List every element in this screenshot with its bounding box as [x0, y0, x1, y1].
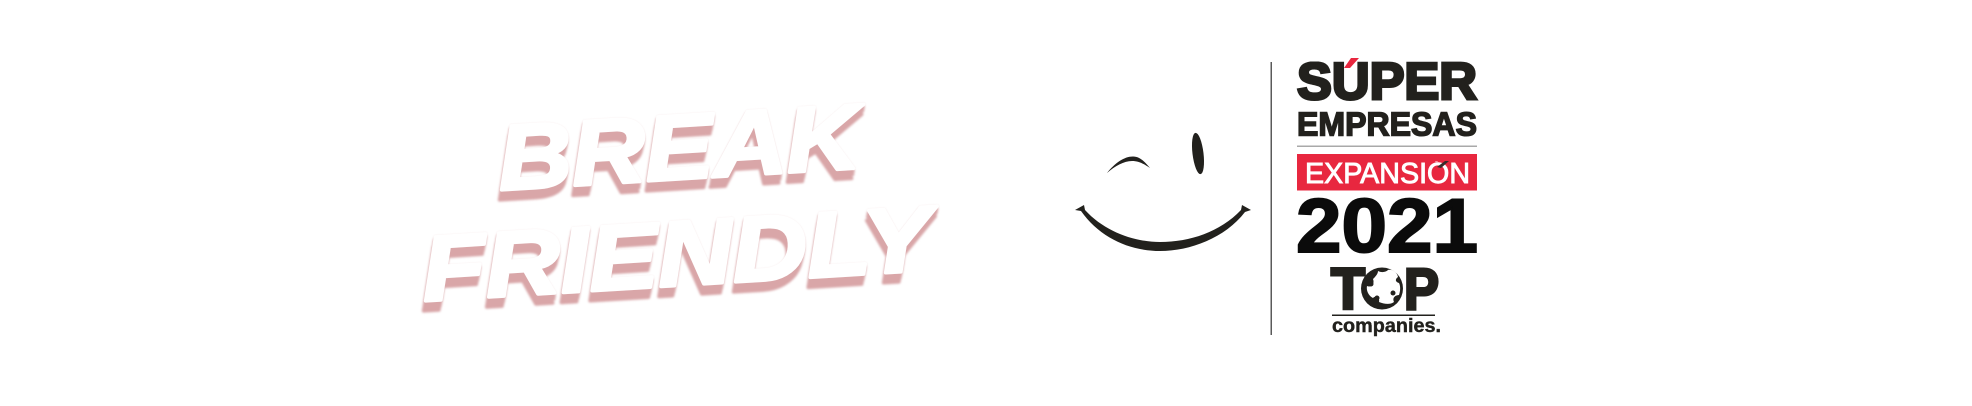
title: Break Friendly [419, 86, 943, 321]
logo: Súper Empresas Expansión 2021 [1296, 53, 1478, 337]
icon: closed eye [1107, 156, 1150, 173]
icon: open eye [1190, 132, 1206, 175]
logo rule [1332, 314, 1435, 316]
logo badge: EXPANSIÓN: EXPANSIÓN [1305, 157, 1470, 190]
divider line [1270, 62, 1272, 335]
logo year: 2021: 2021 [1296, 184, 1478, 269]
logo text: EMPRESAS: EMPRESAS [1297, 106, 1477, 142]
icon: winking smile [1075, 132, 1251, 251]
title line: FRIENDLY: FRIENDLY [419, 187, 943, 321]
logo text: T: T [1331, 257, 1365, 322]
icon: puzzle circle O [1361, 268, 1403, 310]
logo: TOP companies [1331, 257, 1441, 337]
icon: smile mouth [1075, 205, 1251, 251]
logo text: SÚPER: SÚPER [1297, 53, 1477, 111]
logo text: P: P [1404, 257, 1439, 322]
logo rule [1297, 146, 1477, 147]
logo text: companies.: companies. [1332, 316, 1441, 337]
title line: BREAK: BREAK [495, 86, 870, 210]
